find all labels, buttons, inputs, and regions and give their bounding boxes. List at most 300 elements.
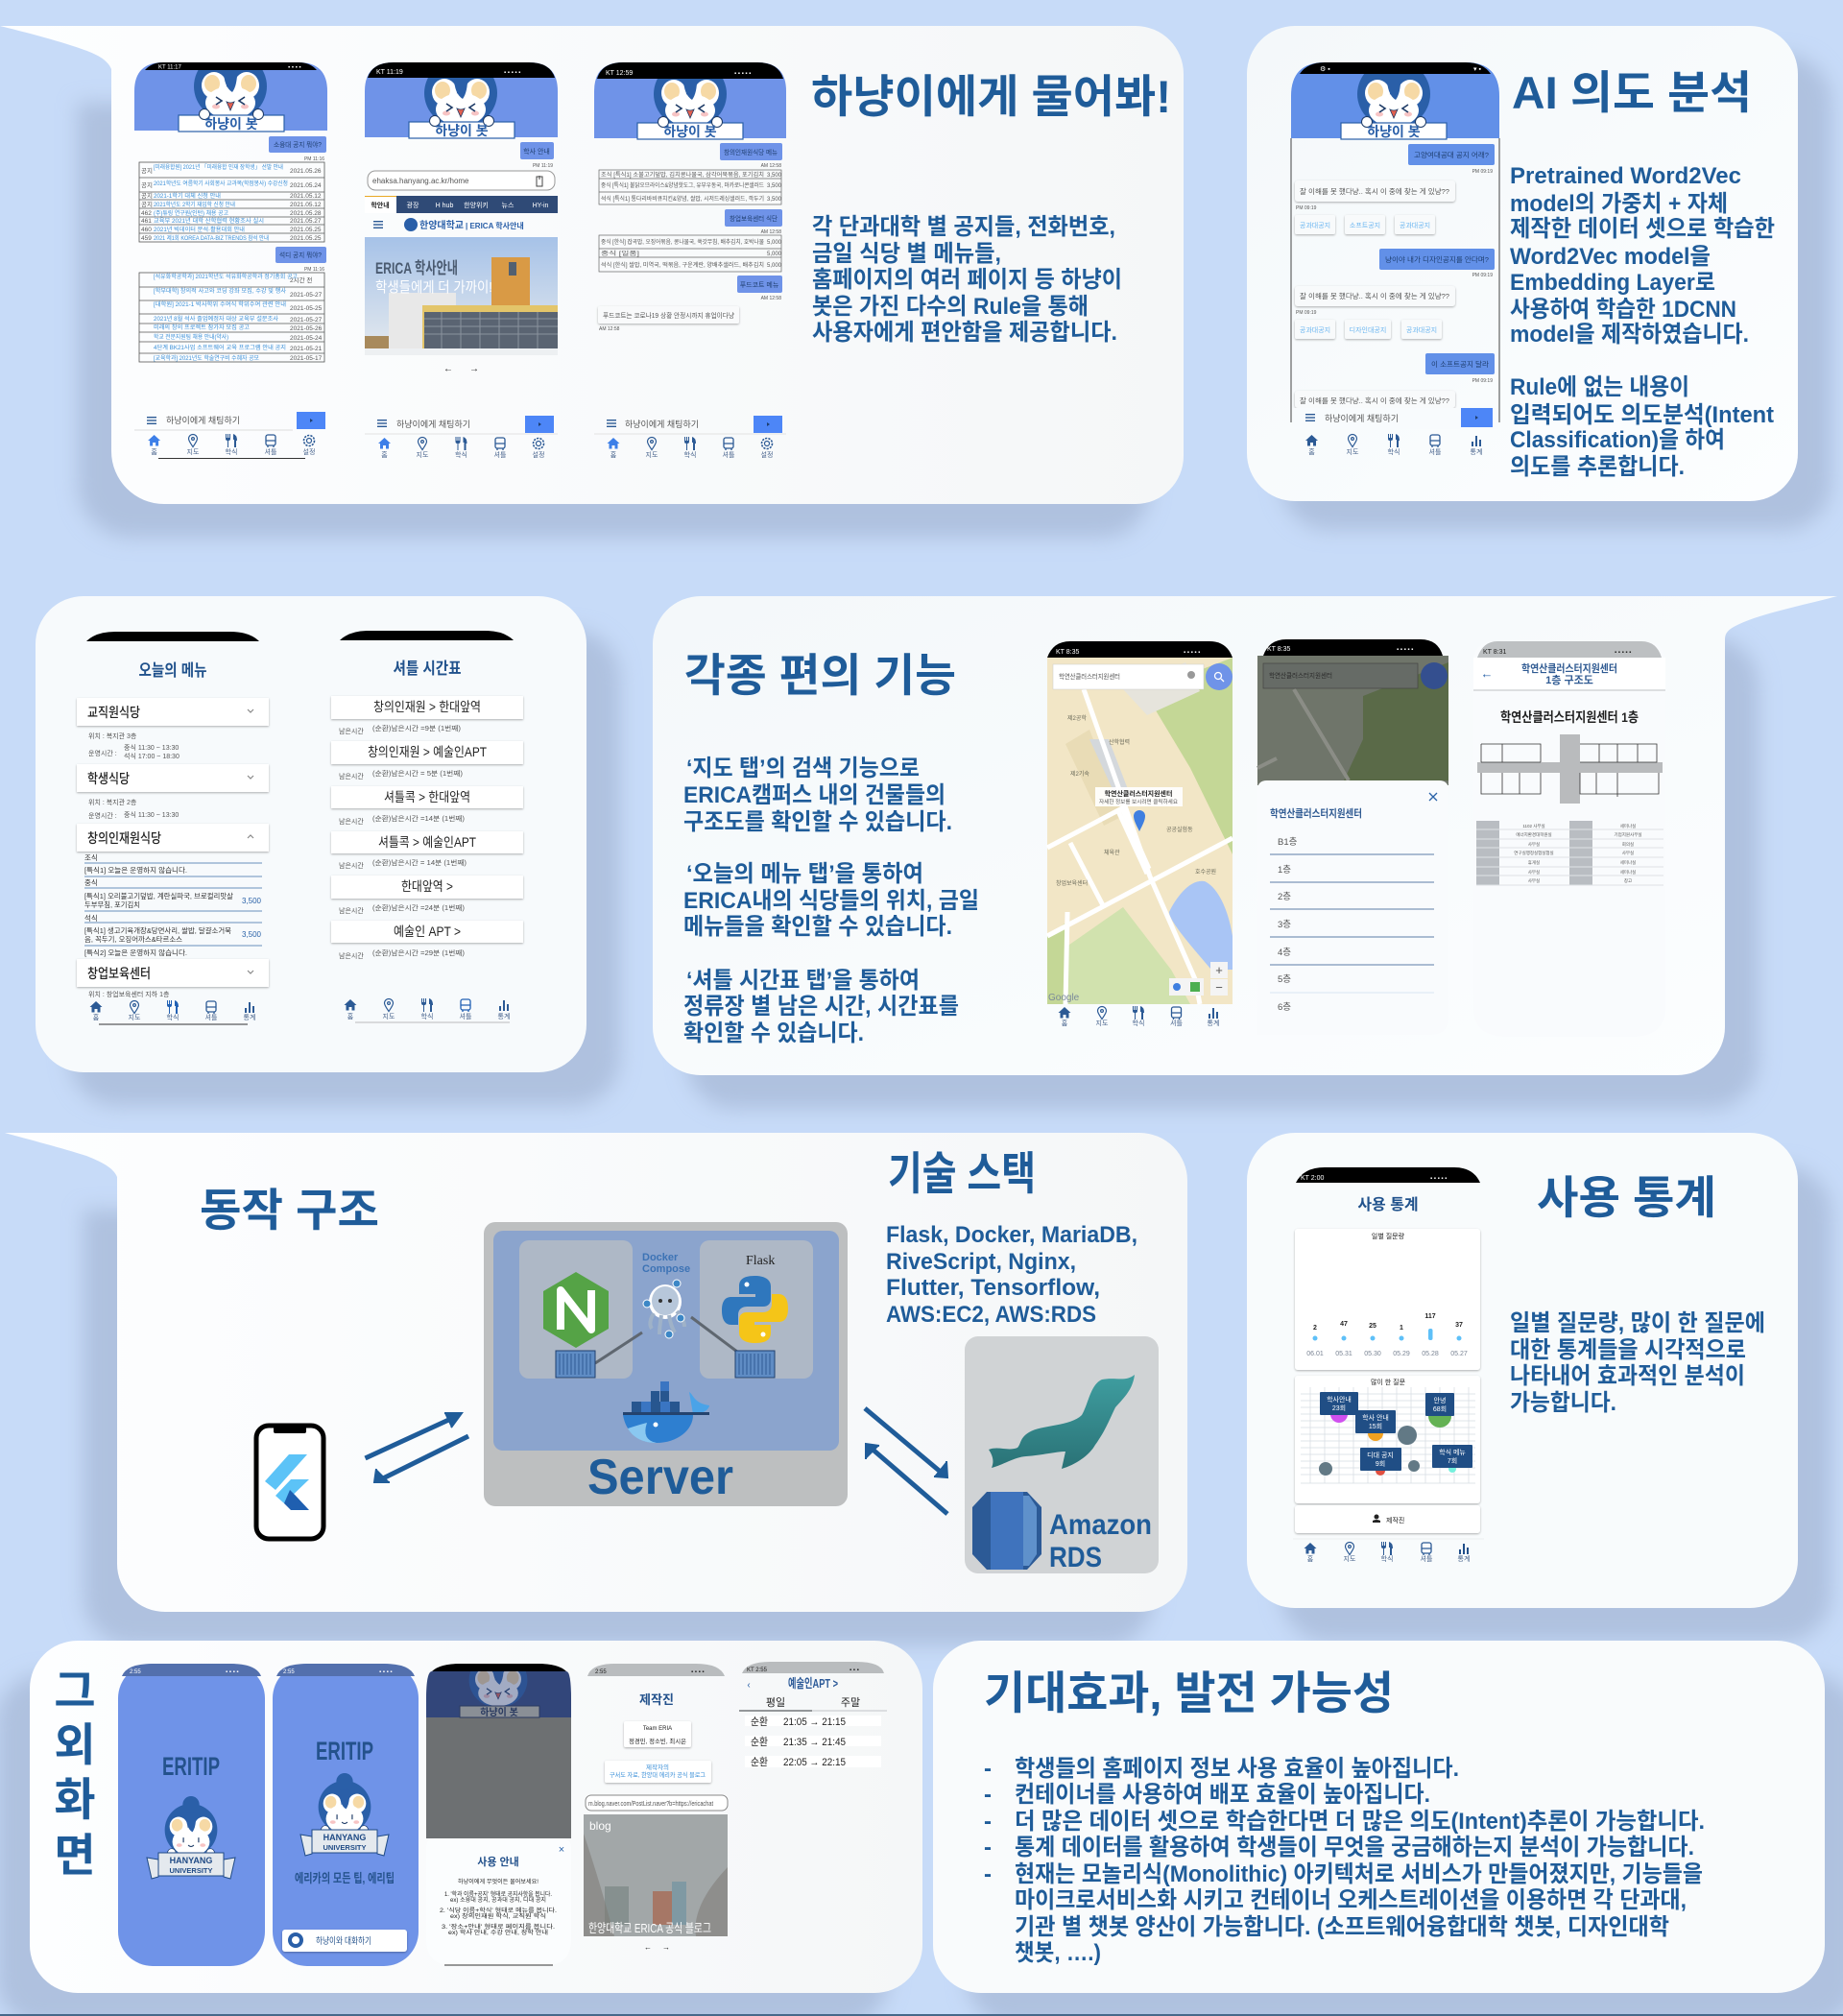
phone: shuttle times: 순환 xyxy=(751,1756,768,1768)
panel: menu and shuttle card xyxy=(36,596,586,1072)
phone: credits and blog: m.blog.naver.com/PostList.naver?b=https://ericachat xyxy=(588,1799,714,1808)
phone: usage stats: 05.30 xyxy=(1364,1351,1381,1357)
phone: today's menu: 학생식당 xyxy=(87,771,130,786)
phone: credits and blog: Team ERIA xyxy=(643,1726,672,1732)
phone: shuttle timetable: (순환)남은시간 =24분 (1번째) xyxy=(372,903,465,912)
phone: cafeteria menu chat: 석식 [특식1] 통다리바비큐치킨&양념, 쌀밥, 시저드레싱샐러드, 깍두기 xyxy=(601,195,764,203)
phone: today's menu: [특식2] 오늘은 운영하지 않습니다. xyxy=(84,948,187,957)
phone: cafeteria menu chat: AM 12:58 xyxy=(761,229,781,235)
heading: how it works: 동작 구조 xyxy=(200,1185,379,1236)
phone: cafeteria menu chat: 3,500 xyxy=(767,197,782,203)
heading: other screens vertical: 면 xyxy=(54,1830,96,1881)
phone: shuttle timetable: 남은시간 xyxy=(339,951,364,960)
phone: shuttle times: KT 2:55 xyxy=(747,1668,768,1673)
phone: usage guide: 하냥이에게 무엇이든 물어보세요! xyxy=(458,1878,539,1885)
phone: notice chat: KT 11:17 xyxy=(158,65,181,71)
phone: notice chat: [석유화학공학과] 2021학년도 석유화학공학과 정기총회 공고 xyxy=(154,273,298,280)
phone: homepage link chat: 학생들에게 더 가까이! xyxy=(375,279,492,296)
text: expected effects list: 챗봇, ….) xyxy=(1015,1940,1101,1966)
phone: cafeteria menu chat: 설정 xyxy=(761,450,773,459)
phone: notice chat: 2021년 빅데이터 분석·활용대회 안내 xyxy=(154,226,245,233)
panel: other screens card xyxy=(30,1641,922,1993)
phone: intent analysis chat: 고양여대공대 공지 어래? xyxy=(1414,150,1489,159)
phone: usage stats: 안녕 xyxy=(1434,1396,1446,1404)
phone: homepage link chat: 학안내 xyxy=(371,201,390,209)
text: usage stats description: 나타내어 효과적인 분석이 xyxy=(1510,1363,1745,1389)
phone: notice chat: 2021.05.12 xyxy=(290,193,322,200)
phone: today's menu: 운영시간 : xyxy=(88,811,117,820)
phone: credits and blog: 2:55 xyxy=(595,1669,607,1675)
text: AI intent description: model의 가중치 + 자체 xyxy=(1510,191,1728,217)
phone: map search: KT 8:35 xyxy=(1056,649,1079,656)
label: docker compose xyxy=(642,1252,690,1275)
phone: shuttle timetable: 학식 xyxy=(421,1012,433,1020)
phone: today's menu: 중식 11:30 ~ 13:30 xyxy=(124,743,179,752)
phone: intent analysis chat: 하냥이 봇 xyxy=(1367,124,1421,139)
icon: docker whale xyxy=(623,1381,709,1443)
phone: map search: 자세한 정보를 보시려면 클릭하세요 xyxy=(1099,798,1178,805)
heading: other screens vertical: 그 xyxy=(54,1666,96,1716)
phone: cafeteria menu chat xyxy=(594,60,786,459)
diagram: server box xyxy=(484,1222,848,1506)
phone: map search: 학연산클러스터지원센터 xyxy=(1105,789,1172,798)
phone: usage stats: 학식 메뉴 xyxy=(1439,1448,1466,1456)
phone: usage stats: 9회 xyxy=(1376,1460,1385,1468)
phone: floor plan: 사무실 xyxy=(1528,841,1540,848)
phone: today's menu: 석식 xyxy=(84,913,98,923)
phone: intent analysis chat: 잘 이해를 못 했다냥.. 혹시 이 중에 찾는 게 있냥?? xyxy=(1300,396,1449,405)
phone: credits and blog: 제작자의 xyxy=(646,1763,669,1771)
phone: cafeteria menu chat: AM 12:58 xyxy=(599,326,620,332)
phone: usage stats: 많이 한 질문 xyxy=(1371,1378,1406,1386)
phone: today's menu: [특식1] 오리불고기덮밥, 계란실파국, 브로컬리맛살 xyxy=(84,891,233,900)
phone: credits and blog: 제작진 xyxy=(639,1692,674,1707)
phone: usage stats: 25 xyxy=(1369,1323,1376,1330)
phone: shuttle timetable: (순환)남은시간 = 14분 (1번째) xyxy=(372,858,467,867)
phone: usage guide: 1. '학과 이름+공지' 형태로 공지사항을 봅니다. xyxy=(444,1890,552,1898)
phone: notice chat: 2021-05-27 xyxy=(290,317,323,324)
phone: cafeteria menu chat: 셔틀 xyxy=(723,450,735,459)
phone: today's menu: 3,500 xyxy=(242,930,262,939)
phone: today's menu xyxy=(77,632,269,1024)
phone: shuttle timetable: 예술인 APT > xyxy=(394,924,461,939)
phone: cafeteria menu chat: 하냥이에게 채팅하기 xyxy=(625,420,699,429)
phone: homepage link chat: 뉴스 xyxy=(502,202,515,209)
phone: floor plan: 사무실 xyxy=(1528,869,1540,876)
phone: start screen: 에리카의 모든 팁, 에리팁 xyxy=(295,1871,395,1885)
phone: map search: 체육관 xyxy=(1104,849,1120,856)
text: expected effects list: - xyxy=(984,1809,992,1835)
phone: shuttle timetable: 셔틀콕 > 한대앞역 xyxy=(384,790,470,804)
phone: today's menu: 위치 : 창업보육센터 지하 1층 xyxy=(88,990,170,998)
label: amazon rds: Amazon xyxy=(1049,1509,1152,1541)
phone: usage stats: 통계 xyxy=(1458,1554,1470,1563)
phone: homepage link chat: 한양대학교 xyxy=(419,219,464,231)
text: ask hanyang description: 봇은 가진 다수의 Rule을 통해 xyxy=(812,294,1089,320)
text: expected effects list: 컨테이너를 사용하여 배포 효율이 높아집니다. xyxy=(1015,1782,1430,1808)
phone: shuttle timetable: 남은시간 xyxy=(339,817,364,826)
phone: homepage link chat: ehaksa.hanyang.ac.kr/home xyxy=(372,177,469,185)
phone: notice chat: 2021-05-27 xyxy=(290,292,323,299)
phone: floor plan: 휴게실 xyxy=(1528,859,1540,866)
phone: usage stats: 68회 xyxy=(1433,1405,1447,1413)
phone: cafeteria menu chat: KT 12:59 xyxy=(606,70,633,77)
phone: start screen: UNIVERSITY xyxy=(323,1843,367,1852)
phone: today's menu: 학식 xyxy=(167,1013,179,1021)
phone: usage guide: × xyxy=(559,1844,564,1856)
phone: intent analysis chat: ▾ ▪ xyxy=(1473,66,1481,73)
phone: map search: 호수공원 xyxy=(1195,868,1216,876)
phone: homepage link chat: 학사 안내 xyxy=(523,147,550,156)
text: ask hanyang description: 사용자에게 편안함을 제공합니다. xyxy=(812,320,1117,346)
phone: homepage link chat: ▪ ▪ ▪ ▪ ▪ xyxy=(504,70,520,76)
text: AI intent description xyxy=(1510,163,1775,480)
phone: notice chat: 하냥이 봇 xyxy=(204,116,258,132)
heading: other screens vertical: 화 xyxy=(54,1774,96,1825)
text: AI intent description: Pretrained Word2Vec xyxy=(1510,163,1741,189)
phone: splash: 2:55 xyxy=(130,1669,141,1675)
phone: floor plan: 세미나실 xyxy=(1620,869,1636,876)
phone: cafeteria menu chat: 중식 [일품] xyxy=(601,250,639,257)
phone: splash: UNIVERSITY xyxy=(169,1866,213,1875)
phone: shuttle timetable: 남은시간 xyxy=(339,727,364,735)
phone: usage guide: 사용 안내 xyxy=(477,1855,519,1868)
phone: usage stats: 학사 안내 xyxy=(1362,1413,1389,1422)
phone: notice chat: 2021학년도 여름학기 사회봉사 교과목(학점봉사) 수강신청 xyxy=(154,180,288,187)
phone: today's menu: 조식 xyxy=(84,853,98,862)
phone: notice chat: [교육학과] 2021년도 학술연구비 수혜자 공모 xyxy=(154,354,259,362)
text: expected effects list: - xyxy=(984,1782,992,1808)
phone: shuttle times: ▪ ▪ ▪ xyxy=(850,1668,859,1673)
text: convenience description: ERICA내의 식당들의 위치, 금일 xyxy=(683,888,979,914)
phone: credits and blog: ← xyxy=(644,1943,652,1952)
phone: start screen: ▪ ▪ ▪ ▪ xyxy=(379,1669,393,1675)
phone: intent analysis chat: 냥이야 내가 디자인공지를 안다며? xyxy=(1385,254,1489,264)
phone: homepage link chat: ERICA 학사안내 xyxy=(375,259,458,277)
phone: floor plan: 창고 xyxy=(1624,877,1632,883)
phone: floor plan: 세미나실 xyxy=(1620,823,1636,829)
text: expected effects list: 마이크로서비스화 시키고 컨테이너 오케스트레이션을 이용하면 각 단과대, xyxy=(1015,1887,1687,1913)
bottom edge line xyxy=(0,2014,1843,2016)
phone: intent analysis chat: 이 소프트공지 달라 xyxy=(1431,359,1489,369)
phone: notice chat: 460 xyxy=(141,227,152,233)
phone: homepage link chat: PM 11:19 xyxy=(533,163,553,169)
phone: cafeteria menu chat: 푸드코트는 코로나19 상황 안정시까지 휴업이다냥 xyxy=(603,311,735,320)
phone: notice chat: 학교 전문지원팀 채용 안내(약사) xyxy=(154,333,228,341)
phone: notice chat: 4단계 BK21사업 소프트웨어 교육 프로그램 안내 공지 xyxy=(154,344,286,351)
phone: start screen: 2:55 xyxy=(283,1669,295,1675)
phone: shuttle timetable: 지도 xyxy=(383,1012,395,1020)
text: expected effects list: 통계 데이터를 활용하여 학생들이 무엇을 궁금해하는지 분석이 가능합니다. xyxy=(1015,1835,1694,1860)
phone: intent analysis chat: 소프트공지 xyxy=(1350,221,1380,229)
panel: convenience features card xyxy=(653,596,1837,1075)
phone: today's menu: 오늘의 메뉴 xyxy=(138,661,207,680)
phone: intent analysis chat: 학식 xyxy=(1388,447,1400,456)
phone: credits and blog: 정경민, 정소빈, 최시은 xyxy=(629,1737,686,1745)
text: convenience description: 정류장 별 남은 시간, 시간표를 xyxy=(683,994,959,1020)
text: usage stats description: 가능합니다. xyxy=(1510,1390,1616,1416)
phone: usage stats: 홈 xyxy=(1307,1554,1314,1563)
phone: homepage link chat: 셔틀 xyxy=(494,450,507,459)
phone: intent analysis chat: PM 09:19 xyxy=(1472,273,1493,278)
phone: cafeteria menu chat: 중식 [한식] 잡곡밥, 오징어볶음, 콩나물국, 쑥갓무침, 배추김치, 호박나물 xyxy=(601,238,764,246)
phone: notice chat: 2021 제1회 KOREA DATA-BIZ TRENDS 참석 안내 xyxy=(154,234,269,242)
text: expected effects list: - xyxy=(984,1861,992,1887)
phone: homepage link chat: 하냥이에게 채팅하기 xyxy=(396,420,470,429)
phone: shuttle timetable: 셔틀 xyxy=(460,1012,472,1020)
phone: cafeteria menu chat: 5,000 xyxy=(767,252,782,257)
phone: usage stats: 디대 공지 xyxy=(1367,1451,1394,1459)
phone: homepage link chat: 홈 xyxy=(381,450,388,459)
phone: shuttle timetable: 셔틀콕 > 예술인APT xyxy=(378,835,476,850)
phone: notice chat: 하냥이에게 채팅하기 xyxy=(166,416,240,425)
phone: start screen xyxy=(273,1664,419,1966)
diagram: database box xyxy=(965,1336,1159,1573)
panel: expected effects card xyxy=(933,1641,1825,1993)
text: ask hanyang description: 홈페이지의 여러 페이지 등 하냥이 xyxy=(812,267,1122,293)
text: expected effects list: 기관 별 챗봇 양산이 가능합니다. (소프트웨어융합대학 챗봇, 디자인대학 xyxy=(1015,1914,1669,1940)
phone: usage stats: 05.29 xyxy=(1393,1351,1410,1357)
phone: map search: 학연산클러스터지원센터 xyxy=(1059,672,1120,681)
phone: usage guide: ex) 소융대 공지, 공과대 공지, 디대 공지 xyxy=(450,1896,546,1904)
text: AI intent description: model을 제작하였습니다. xyxy=(1510,322,1749,348)
phone: intent analysis chat: 공과대공지 xyxy=(1300,325,1330,334)
phone: usage stats: 06.01 xyxy=(1306,1351,1324,1357)
phone: notice chat: 학식 xyxy=(226,447,237,456)
phone: intent analysis chat: 잘 이해를 못 했다냥.. 혹시 이 중에 찾는 게 있냥?? xyxy=(1300,291,1449,300)
heading: convenience features: 각종 편의 기능 xyxy=(684,650,956,701)
phone: cafeteria menu chat: 3,500 xyxy=(767,173,782,179)
phone: notice chat: 2021-05-26 xyxy=(290,325,323,332)
phone: cafeteria menu chat: 3,500 xyxy=(767,183,782,189)
phone: notice chat: 소융대 공지 뭐야? xyxy=(274,140,322,149)
text: convenience description: ‘오늘의 메뉴 탭’을 통하여 xyxy=(686,861,923,887)
phone: intent analysis chat: 홈 xyxy=(1308,447,1315,456)
phone: today's menu: 중식 11:30 ~ 13:30 xyxy=(124,810,179,819)
text: ask hanyang description: 금일 식당 별 메뉴들, xyxy=(812,241,1001,267)
text: convenience description: ‘셔틀 시간표 탭’을 통하여 xyxy=(686,968,920,994)
phone: today's menu: 위치 : 복지관 2층 xyxy=(88,798,137,806)
text: AI intent description: Rule에 없는 내용이 xyxy=(1510,374,1689,400)
phone: notice chat: 2021학년도 2학기 재입학 신청 안내 xyxy=(154,201,235,208)
panel: architecture card xyxy=(5,1133,1187,1612)
heading: expected effects: 기대효과, 발전 가능성 xyxy=(984,1668,1394,1718)
phone: floor plan: 회의실 xyxy=(1622,841,1634,848)
phone: shuttle timetable: (순환)남은시간 =9분 (1번째) xyxy=(372,724,461,732)
text: convenience description: ‘지도 탭’의 검색 기능으로 xyxy=(686,756,920,781)
phone: intent analysis chat: 공과대공지 xyxy=(1400,221,1430,229)
phone: homepage link chat: KT 11:19 xyxy=(376,69,403,76)
phone: notice chat: (주)튜링 연구원(인턴) 채용 공고 xyxy=(154,209,228,217)
label: amazon rds: RDS xyxy=(1049,1542,1102,1573)
phone: notice chat: 2021.05.25 xyxy=(290,235,322,242)
phone: cafeteria menu chat: 5,000 xyxy=(767,240,782,246)
phone: notice chat: [학부대학] 창의적 사고와 코딩 강좌 모집, 수강 및 행사 xyxy=(154,287,286,295)
phone: usage stats: 제작진 xyxy=(1386,1516,1404,1524)
text: convenience description xyxy=(683,756,979,1046)
phone: usage stats: 23회 xyxy=(1332,1404,1346,1412)
phone: notice chat: 2021-05-21 xyxy=(290,346,323,352)
phone: today's menu: 운영시간 : xyxy=(88,749,117,757)
phone: building floor sheet: 4층 xyxy=(1278,948,1291,958)
phone: today's menu: 셔틀 xyxy=(205,1013,218,1021)
phone: notice chat: 홈 xyxy=(151,447,157,456)
phone: today's menu: 홈 xyxy=(93,1013,100,1021)
phone: notice chat: 2021-05-17 xyxy=(290,355,323,362)
phone: building floor sheet: 학연산클러스터지원센터 xyxy=(1269,671,1332,680)
phone: building floor sheet: KT 8:35 xyxy=(1267,646,1290,653)
phone: today's menu: 창의인재원식당 xyxy=(87,830,161,846)
phone: shuttle times: 예술인APT > xyxy=(788,1676,838,1691)
phone: map search: ▪ ▪ ▪ ▪ ▪ xyxy=(1184,650,1200,656)
phone: intent analysis chat: 통계 xyxy=(1471,447,1482,456)
phone: start screen: HANYANG xyxy=(323,1833,366,1842)
phone: notice chat: 2시간 전 xyxy=(290,276,312,284)
phone: credits and blog xyxy=(584,1664,728,1952)
phone: today's menu: [특식1] 오늘은 운영하지 않습니다. xyxy=(84,865,187,875)
phone: building floor sheet: B1층 xyxy=(1278,837,1298,848)
phone: building floor sheet: 학연산클러스터지원센터 xyxy=(1270,806,1362,820)
phone: cafeteria menu chat: AM 12:58 xyxy=(761,296,781,301)
phone: shuttle timetable: 남은시간 xyxy=(339,861,364,870)
heading: AI intent analysis: AI 의도 분석 xyxy=(1512,67,1752,118)
phone: shuttle times: 21:35 → 21:45 xyxy=(783,1737,846,1748)
icon: python xyxy=(722,1276,788,1343)
icon: amazon rds xyxy=(972,1492,1041,1570)
phone: building floor sheet xyxy=(1257,639,1448,1035)
phone: intent analysis chat: PM 09:19 xyxy=(1472,378,1493,384)
phone: usage stats: 학사안내 xyxy=(1327,1395,1352,1404)
phone: credits and blog: blog xyxy=(589,1819,611,1833)
phone: usage stats: 05.28 xyxy=(1422,1351,1439,1357)
phone: credits and blog: 한양대학교 ERICA 공식 블로그 xyxy=(588,1921,711,1935)
phone: shuttle timetable: 남은시간 xyxy=(339,906,364,915)
panel: ask hanyang card xyxy=(0,26,1184,504)
phone: building floor sheet: 6층 xyxy=(1278,1002,1291,1013)
phone: notice chat: 셔틀 xyxy=(265,447,277,456)
phone: today's menu: 음, 꼭두기, 오징어까스&타르소스 xyxy=(84,934,182,944)
phone: notice chat: 2021-05-24 xyxy=(290,335,323,342)
phone: map search: − xyxy=(1215,980,1223,995)
phone: homepage link chat: 한양위키 xyxy=(464,201,489,209)
phone: shuttle times: 21:05 → 21:15 xyxy=(783,1716,846,1728)
phone: map search: 창업보육센터 xyxy=(1056,879,1088,887)
phone: credits and blog: 구서도 자료, 한양대 에리카 공식 블로그 xyxy=(610,1770,706,1779)
phone: notice chat: 2021.05.28 xyxy=(290,210,322,217)
label: amazon rds xyxy=(1049,1509,1152,1573)
phone: cafeteria menu chat: 창업보육센터 식단 xyxy=(730,214,778,223)
label: docker compose: Docker xyxy=(642,1252,679,1263)
text: AI intent description: Word2Vec model을 xyxy=(1510,244,1711,270)
phone: today's menu: [특식1] 생고기육개장&당면사리, 쌀밥, 달걀소거묵 xyxy=(84,925,231,935)
phone: usage guide: 3. '장소+안내' 형태로 페이지를 봅니다. xyxy=(442,1923,555,1931)
text: tech stack list xyxy=(886,1222,1137,1328)
icon: flask container xyxy=(735,1351,775,1378)
phone: homepage link chat: 지도 xyxy=(417,450,429,459)
phone: notice chat: 2021.05.27 xyxy=(290,218,322,225)
phone: map search: 학식 xyxy=(1133,1019,1144,1027)
phone: map search: 셔틀 xyxy=(1170,1019,1183,1027)
phone: homepage link chat: H hub xyxy=(436,203,453,209)
phone: floor plan: 1102 사무실 xyxy=(1522,823,1545,829)
icon: nginx container xyxy=(556,1351,595,1378)
phone: map search: 제2기숙 xyxy=(1070,770,1089,778)
arrows: phone and server xyxy=(365,1413,468,1482)
phone: cafeteria menu chat: 중식 [특식1] 불닭오므라이스&양념핫도그, 유부우동국, 마카로니콘샐러드 xyxy=(601,181,764,189)
phone: notice chat: 석디 공지 뭐야? xyxy=(279,251,322,259)
phone: cafeteria menu chat: 조식 [특식1] 소불고기덮밥, 김치콩나물국, 삼각어묵볶음, 포기김치 xyxy=(601,171,764,179)
phone: floor plan: 연구실행정실험실험실 xyxy=(1514,850,1554,856)
phone: usage stats: 일별 질문량 xyxy=(1372,1232,1405,1240)
phone: usage guide: ex) 학사 안내, 수강 안내, 장학 안내 xyxy=(448,1929,548,1936)
phone: floor plan: ▪ ▪ ▪ ▪ ▪ xyxy=(1615,650,1631,656)
container link lines xyxy=(595,1317,737,1363)
phone: today's menu: 두부무침, 포기김치 xyxy=(84,900,140,909)
phone: cafeteria menu chat: 홈 xyxy=(610,450,617,459)
phone: usage guide xyxy=(426,1652,571,1966)
icon: mariadb seal xyxy=(989,1375,1135,1469)
phone: today's menu: 교직원식당 xyxy=(87,705,140,720)
phone: shuttle timetable: (순환)남은시간 = 5분 (1번째) xyxy=(372,769,463,778)
text: usage stats description: 대한 통계들을 시각적으로 xyxy=(1510,1337,1746,1363)
phone: floor plan: 사무실 xyxy=(1622,850,1634,856)
phone: intent analysis chat: 지도 xyxy=(1347,447,1359,456)
phone: shuttle timetable: 창의인재원 > 한대앞역 xyxy=(373,700,481,714)
text: expected effects list: - xyxy=(984,1756,992,1782)
phone: shuttle times xyxy=(739,1662,887,1768)
phone: usage stats: 05.27 xyxy=(1450,1351,1468,1357)
phone: intent analysis chat: PM 09:19 xyxy=(1296,310,1317,316)
phone: intent analysis chat: 공과대공지 xyxy=(1406,325,1437,334)
phone: shuttle timetable xyxy=(331,631,523,1022)
phone: cafeteria menu chat: AM 12:58 xyxy=(761,163,781,169)
phone: map search: 홈 xyxy=(1062,1019,1068,1027)
phone: cafeteria menu chat: 창의인재원식당 메뉴 xyxy=(724,148,778,156)
phone: usage stats: 지도 xyxy=(1344,1554,1356,1563)
phone: floor plan: KT 8:31 xyxy=(1483,649,1506,656)
phone: today's menu: 중식 xyxy=(84,878,98,887)
text: expected effects list: 현재는 모놀리식(Monolithic) 아키텍처로 서비스가 만들어졌지만, 기능들을 xyxy=(1015,1861,1703,1887)
phone: building floor sheet: 2층 xyxy=(1278,892,1291,902)
phone: shuttle timetable: (순환)남은시간 =14분 (1번째) xyxy=(372,814,465,823)
text: convenience description: 구조도를 확인할 수 있습니다. xyxy=(683,809,952,835)
phone: shuttle times: 순환 xyxy=(751,1736,768,1748)
phone: notice chat: 공지 xyxy=(141,166,153,175)
phone: notice chat: 미래의 창의 프로젝트 참가자 모집 공고 xyxy=(154,324,250,331)
phone: today's menu: 지도 xyxy=(129,1013,141,1021)
phone: homepage link chat: 광장 xyxy=(407,201,419,209)
phone: start screen: 하냥이와 대화하기 xyxy=(316,1935,371,1947)
icon: compose octopus xyxy=(643,1280,684,1338)
phone: today's menu: 창업보육센터 xyxy=(87,966,151,981)
label: server: Server xyxy=(587,1450,733,1505)
phone: shuttle times: 평일 xyxy=(766,1695,785,1709)
phone: intent analysis chat: 디자인대공지 xyxy=(1350,325,1386,334)
text: ask hanyang description: 각 단과대학 별 공지들, 전화번호, xyxy=(812,214,1115,240)
arrows: server and database xyxy=(865,1408,947,1514)
phone: shuttle times: 주말 xyxy=(841,1696,860,1709)
phone: notice chat: [미래융합원] 2021년 「미래융합 인재 장학생」 선발 안내 xyxy=(154,163,283,171)
phone: shuttle timetable: 통계 xyxy=(498,1012,510,1020)
heading: tech stack: 기술 스택 xyxy=(888,1148,1036,1199)
text: AI intent description: 사용하여 학습한 1DCNN xyxy=(1510,297,1736,323)
phone: building floor sheet: ▪ ▪ ▪ ▪ ▪ xyxy=(1397,647,1413,653)
text: tech stack list: RiveScript, Nginx, xyxy=(886,1249,1076,1275)
heading: ask hanyang: 하냥이에게 물어봐! xyxy=(811,71,1171,122)
phone: cafeteria menu chat: 석식 [한식] 쌀밥, 미역국, 떡볶음, 구운계란, 양배추샐러드, 배추김치 xyxy=(601,261,764,269)
phone: notice chat: 461 xyxy=(141,218,152,225)
phone: usage stats: KT 2:00 xyxy=(1301,1175,1324,1182)
